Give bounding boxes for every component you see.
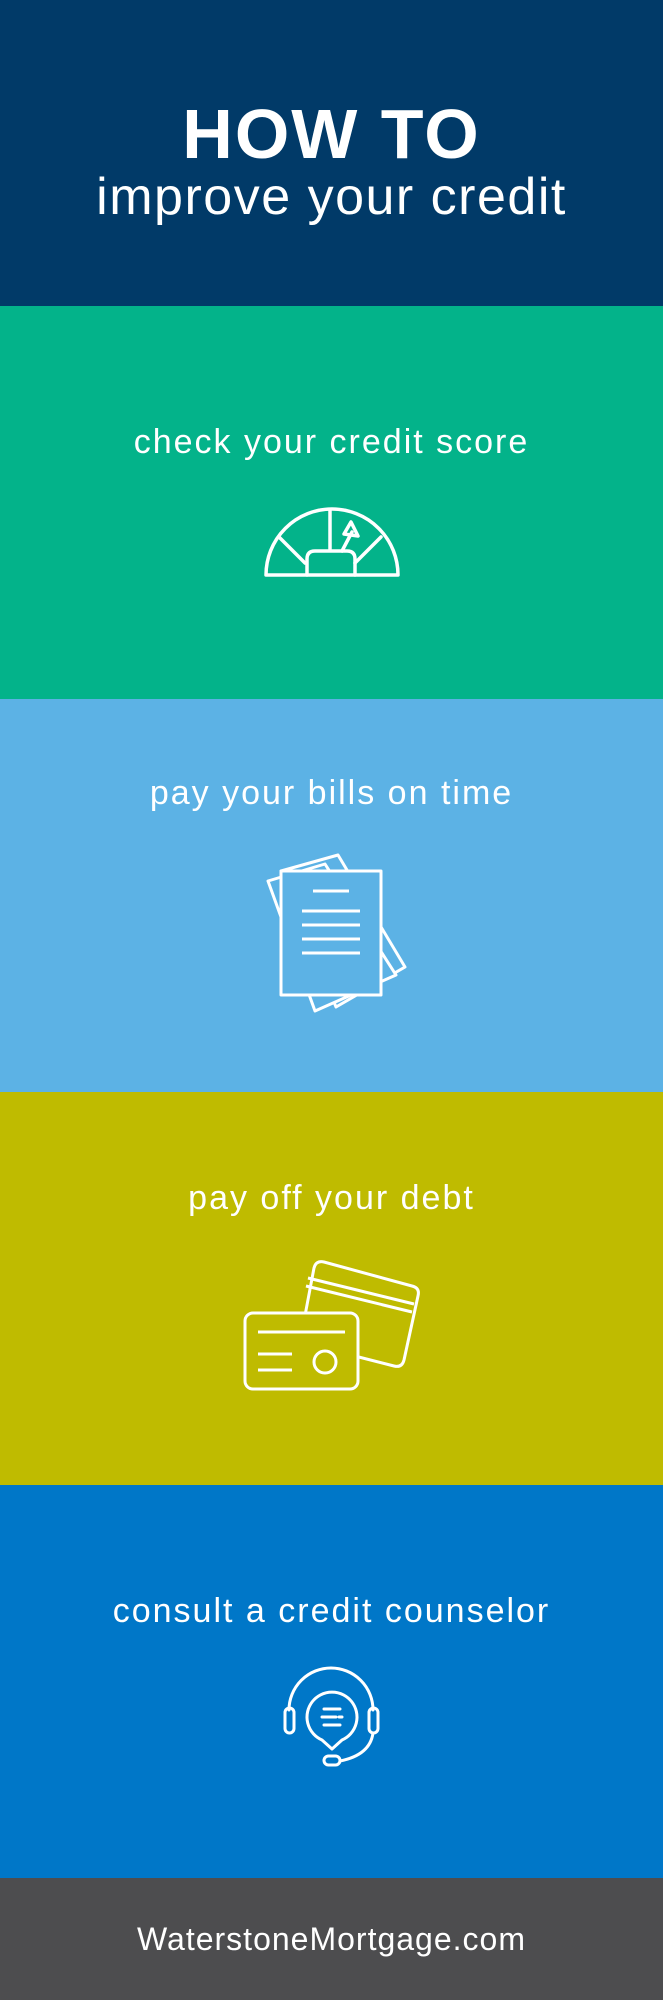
label: pay off your debt bbox=[188, 1179, 475, 1217]
subtitle: improve your credit bbox=[96, 168, 567, 226]
icon: gauge bbox=[264, 507, 400, 577]
title: HOW TO bbox=[182, 95, 481, 173]
label: consult a credit counselor bbox=[113, 1592, 550, 1630]
footer bbox=[0, 1878, 663, 2000]
panel: consult counselor bbox=[0, 1485, 663, 1878]
icon: credit cards bbox=[244, 1260, 420, 1390]
label: check your credit score bbox=[134, 423, 529, 461]
icon: documents bbox=[266, 854, 406, 1012]
icon: headset bbox=[284, 1666, 380, 1766]
footer text: WaterstoneMortgage.com bbox=[137, 1921, 526, 1957]
panel: check credit score bbox=[0, 306, 663, 699]
panel: pay off debt bbox=[0, 1092, 663, 1485]
header bbox=[0, 0, 663, 306]
panel: pay bills bbox=[0, 699, 663, 1092]
label: pay your bills on time bbox=[150, 774, 513, 812]
